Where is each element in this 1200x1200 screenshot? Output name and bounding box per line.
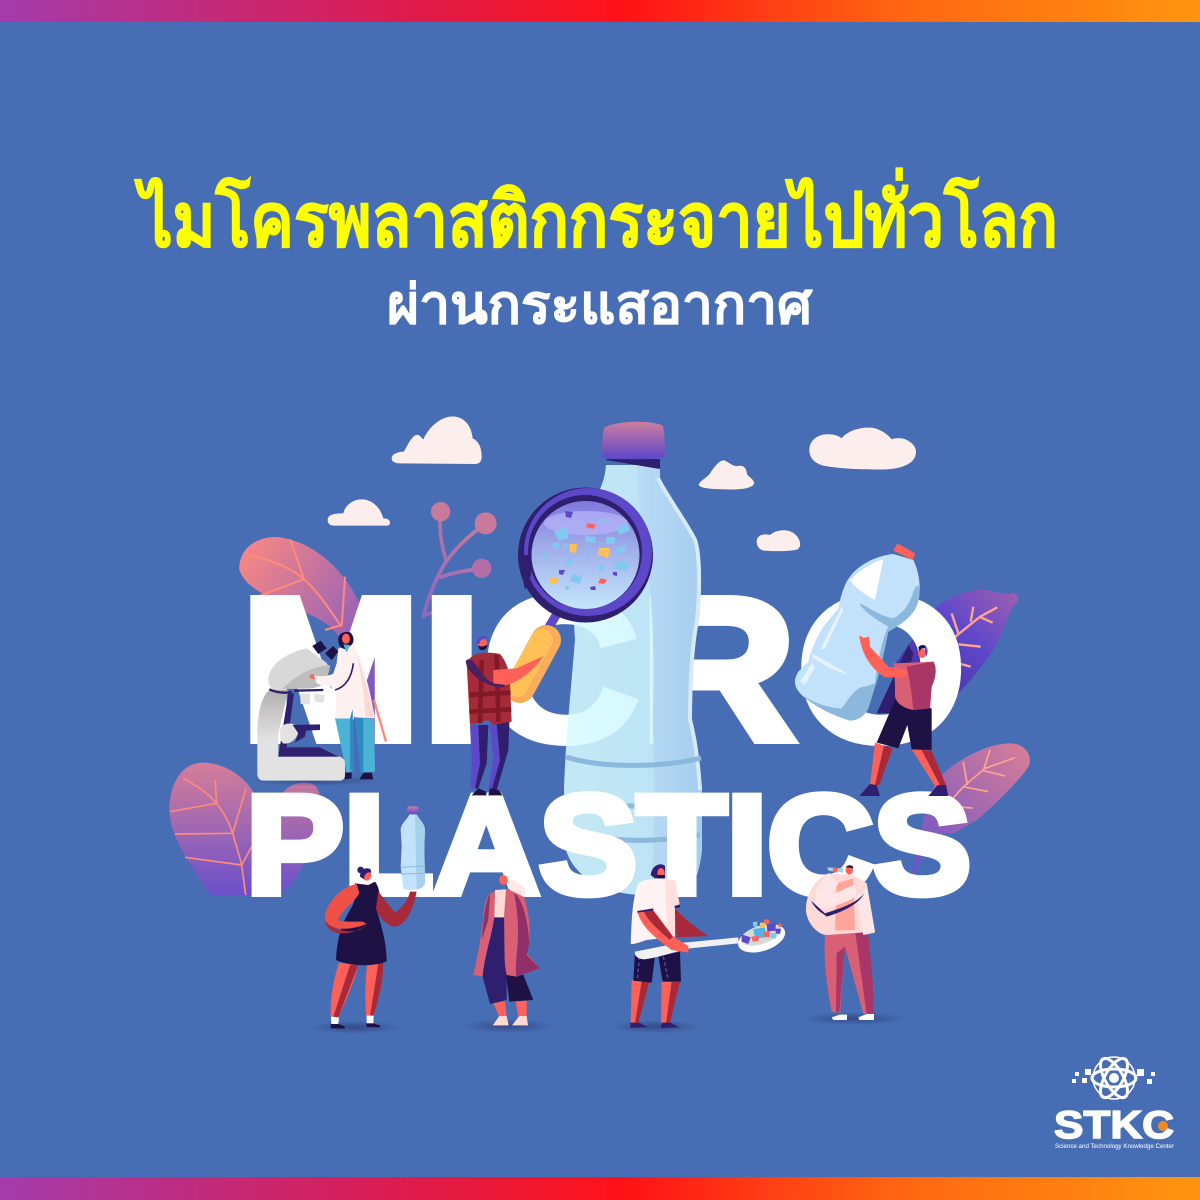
bottle right rim highlight: [658, 478, 700, 790]
bottle ridges: [566, 757, 702, 840]
hair and face: [338, 632, 354, 649]
leaf: upper right: [893, 590, 1018, 700]
shoes: [345, 773, 373, 779]
legs: [331, 963, 383, 1017]
leaf: upper left: [239, 537, 387, 743]
figure: person drinking from bottle: [802, 864, 908, 1025]
arm: [493, 656, 543, 685]
shoes: [859, 784, 948, 796]
bottle shaded side: [637, 466, 702, 891]
jacket: [806, 873, 875, 935]
shoes: [630, 1023, 679, 1028]
torso: [835, 878, 855, 931]
small water bottle: [401, 806, 425, 890]
microplastic particles: [542, 511, 630, 590]
arm: [859, 635, 907, 677]
socks and shoes: [331, 1016, 374, 1024]
legs: [631, 980, 680, 1023]
arm right: [376, 892, 417, 927]
spoon: [635, 937, 738, 959]
lens: [532, 501, 640, 609]
carried bottle shading: [802, 586, 920, 721]
bottle: [827, 867, 843, 873]
logo pixel squares: [1072, 1069, 1155, 1084]
dark stem: [877, 645, 913, 713]
shorts: [633, 952, 681, 983]
arm: [313, 663, 355, 687]
logo: STKC: [1054, 1054, 1175, 1150]
leaf: lower left: [169, 763, 320, 895]
shirt: [467, 653, 512, 725]
figure: scientist at microscope: [247, 632, 386, 786]
head: [478, 638, 487, 649]
logo orange dot: [1158, 1121, 1168, 1131]
carried bottle: [893, 543, 915, 560]
word: MICRO: MICRO: [240, 555, 966, 784]
title: ไมโครพลาสติกกระจายไปทั่วโลก: [134, 167, 1058, 262]
spoon particles: [742, 919, 782, 944]
logo atom symbol: [1092, 1054, 1136, 1102]
coat right panel: [504, 889, 540, 977]
legs: [470, 722, 509, 790]
microscope: [257, 690, 345, 781]
dress: [336, 882, 387, 965]
arm: [637, 910, 688, 953]
logo wordmark: STKC: [1054, 1104, 1174, 1147]
subtitle: ผ่านกระแสอากาศ: [387, 275, 813, 335]
lab coat: [330, 645, 375, 718]
trousers: [335, 717, 375, 773]
head: [845, 864, 856, 875]
clouds: [328, 416, 916, 551]
shoes: [472, 788, 503, 795]
leaf: lower right: [912, 743, 1030, 873]
shirt: [631, 879, 680, 944]
figure: man holding spoon of microplastics: [610, 864, 789, 1033]
shoes: [832, 1014, 874, 1020]
figure: man in plaid shirt: [466, 636, 543, 795]
bottle collar: [606, 459, 660, 469]
arm left: [325, 920, 367, 933]
logo tagline: Science and Technology Knowledge Center: [1055, 1143, 1175, 1150]
top: [494, 889, 506, 917]
top gradient bar: [0, 0, 1200, 22]
head: [918, 649, 926, 658]
head and hair: [507, 878, 526, 897]
head: [362, 869, 371, 881]
figure: woman holding small bottle: [308, 867, 417, 1034]
handle grip: [520, 640, 546, 688]
branch with berries: [423, 502, 497, 617]
trousers: [825, 930, 874, 1014]
word: PLASTICS: PLASTICS: [246, 766, 971, 923]
bottle body: [564, 465, 702, 895]
shorts: [877, 700, 932, 750]
right arm: [674, 907, 708, 937]
large water bottle: [564, 422, 702, 895]
trousers: [503, 937, 533, 1002]
bottle cap: [602, 422, 665, 459]
coat left panel: [473, 892, 495, 977]
figure: man carrying plastic bottle: [795, 543, 948, 796]
head: [651, 864, 665, 878]
dark strap: [811, 893, 864, 917]
ring: [518, 488, 653, 622]
magnifying glass: [517, 488, 653, 688]
legs: [493, 1001, 527, 1017]
handle neck: [546, 612, 558, 632]
figure: woman in long coat: [462, 875, 555, 1033]
bottom gradient bar: [0, 1177, 1200, 1200]
legs: [870, 743, 947, 788]
shirt: [893, 662, 936, 710]
